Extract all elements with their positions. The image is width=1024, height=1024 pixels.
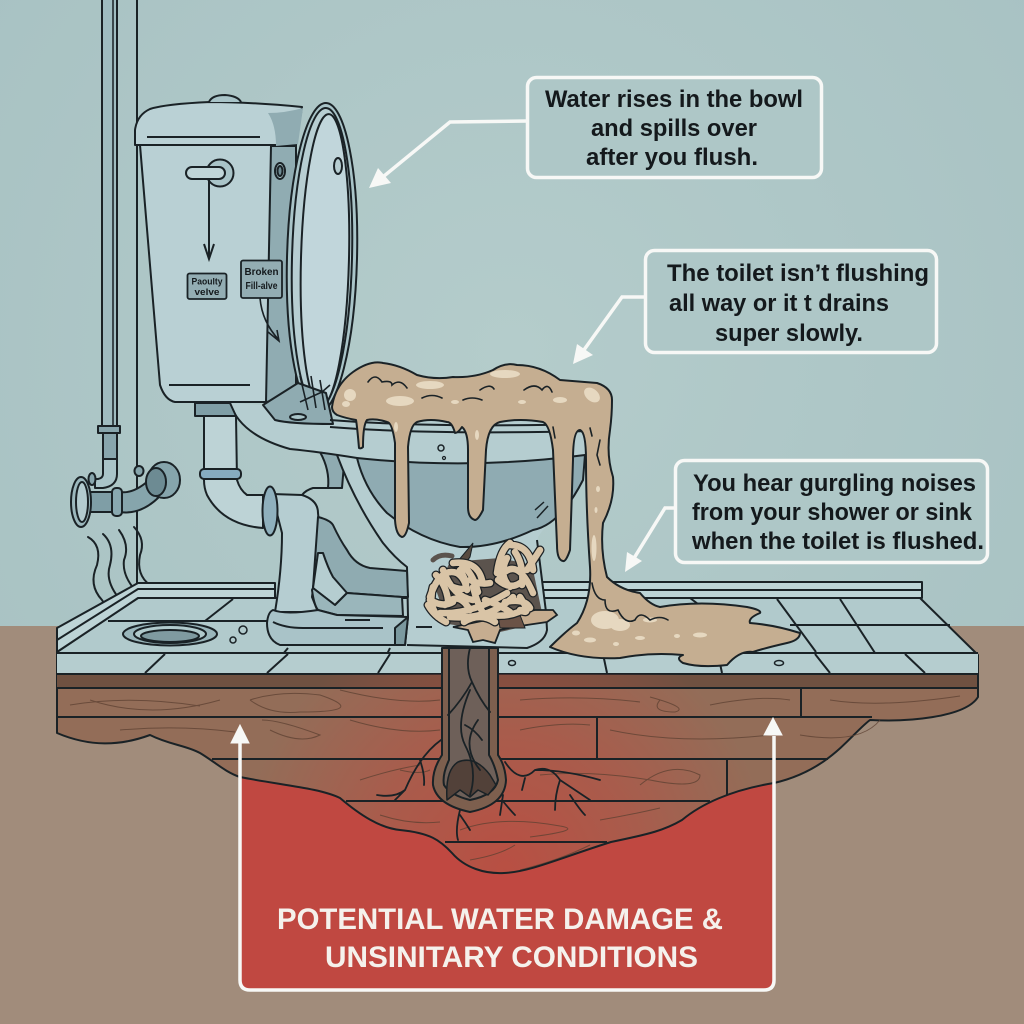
callout: not flushing: all way or it t drains (669, 290, 889, 317)
label: broken fill valve (241, 260, 282, 341)
cracked drain pipe with roots (377, 648, 600, 840)
label: broken fill valve: Broken (244, 267, 278, 278)
hair and debris clog (428, 543, 557, 643)
callout: water rises: after you flush. (586, 144, 758, 171)
callout: gurgling noises (625, 460, 988, 572)
callout: water rises: Water rises in the bowl (545, 86, 803, 113)
ground (0, 626, 1024, 1024)
callout: not flushing (573, 250, 936, 364)
main ceramic body (230, 403, 592, 648)
flush handle and arrow (186, 160, 234, 259)
label: faulty valve (188, 274, 226, 299)
floor water droplets (508, 660, 784, 666)
floor (57, 582, 978, 674)
water damage area with callout frame (231, 718, 782, 990)
rim (330, 420, 590, 432)
toilet tank (135, 95, 303, 402)
callout: gurgling noises: You hear gurgling noises (693, 470, 976, 497)
seat hinge area (263, 383, 333, 424)
damage heading (277, 903, 723, 974)
damage heading: UNSINITARY CONDITIONS (325, 941, 698, 974)
open toilet seat lid (283, 102, 361, 414)
callout: gurgling noises: when the toilet is flushed. (691, 528, 984, 555)
waste pipe behind body (320, 452, 345, 488)
outlet elbow pipe (272, 494, 319, 612)
callout: gurgling noises: from your shower or sink (692, 499, 973, 526)
callout: not flushing: super slowly. (715, 320, 863, 347)
bowl water (357, 455, 585, 547)
label: faulty valve: Paoulty (192, 276, 223, 288)
damage frame and arrows (231, 718, 782, 990)
label: broken fill valve: Fill-alve (246, 281, 278, 292)
callout: water rises: and spills over (591, 115, 757, 142)
odor waves (88, 527, 161, 618)
trapway shading (313, 517, 408, 605)
toilet bowl body and pedestal (230, 376, 592, 648)
callout: water rises (369, 78, 822, 188)
floor drain (123, 622, 247, 646)
overflowing sludge (332, 362, 800, 666)
damage heading: POTENTIAL WATER DAMAGE & (277, 903, 723, 936)
callout: not flushing: The toilet isn’t flushing (667, 260, 929, 287)
base flange (267, 610, 408, 645)
label: faulty valve: velve (194, 287, 220, 298)
drain connector pipe (195, 403, 278, 536)
supply pipe assembly (71, 0, 180, 585)
wooden subfloor (57, 674, 978, 880)
